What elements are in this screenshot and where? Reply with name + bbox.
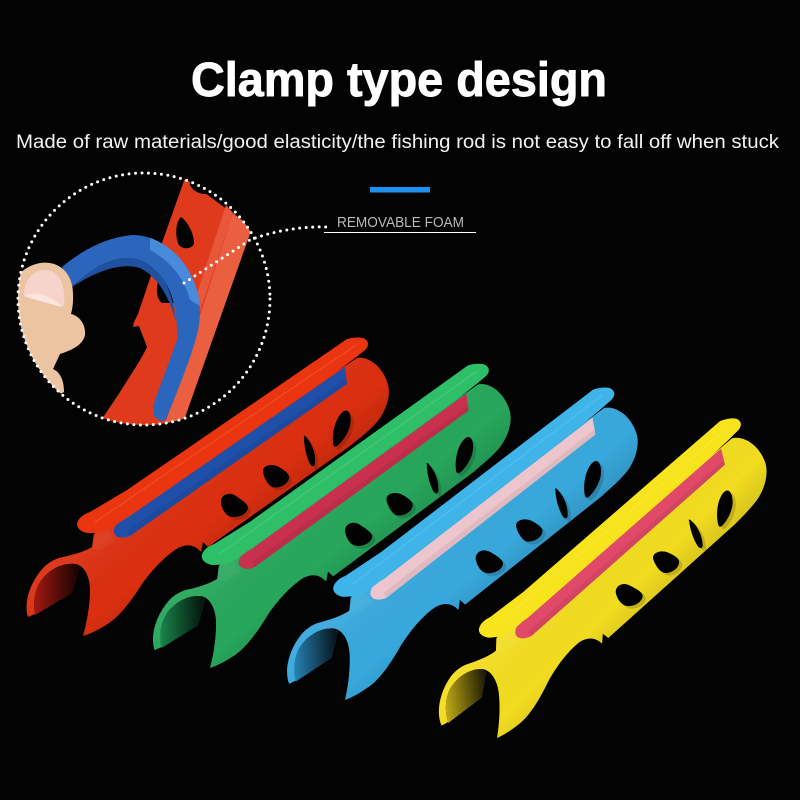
green clip holes: [343, 437, 478, 549]
green clip fin: [198, 364, 493, 565]
clip: yellow: [409, 415, 793, 744]
dotted leader line: [184, 227, 327, 283]
red clip body: [27, 358, 389, 636]
pink foam insert: [362, 418, 603, 600]
title: Clamp type design: [191, 54, 607, 107]
dotted circle outline: [18, 173, 270, 425]
red foam insert: [235, 394, 472, 569]
red clip fin: [77, 338, 368, 533]
blue foam insert: [114, 367, 347, 538]
yellow clip inner mouth: [442, 668, 492, 723]
inset circle: foam close-up: [0, 170, 270, 428]
subtitle: Made of raw materials/good elasticity/the fishing rod is not easy to fall off when stuck: [16, 132, 780, 153]
blue clip inner mouth: [292, 628, 341, 682]
hand holding foam: [18, 262, 86, 394]
red clip close-up: [100, 170, 252, 428]
blue foam strip: [62, 235, 200, 421]
callout: removable foam: REMOVABLE FOAM: [337, 215, 464, 231]
accent bar: [370, 187, 430, 192]
red clip holes: [221, 410, 354, 520]
blue clip body: [274, 406, 650, 703]
green clip inner mouth: [160, 596, 207, 648]
blue clip holes: [471, 461, 609, 577]
clip: red: [27, 338, 389, 636]
clip: blue: [273, 386, 650, 703]
yellow clip body: [412, 435, 793, 744]
yellow clip holes: [606, 490, 746, 610]
pink foam insert: [497, 448, 742, 639]
blue clip fin: [323, 387, 624, 597]
clip: green: [147, 363, 516, 669]
red clip inner mouth: [34, 564, 80, 615]
green clip body: [148, 383, 516, 669]
yellow clip fin: [458, 417, 762, 639]
